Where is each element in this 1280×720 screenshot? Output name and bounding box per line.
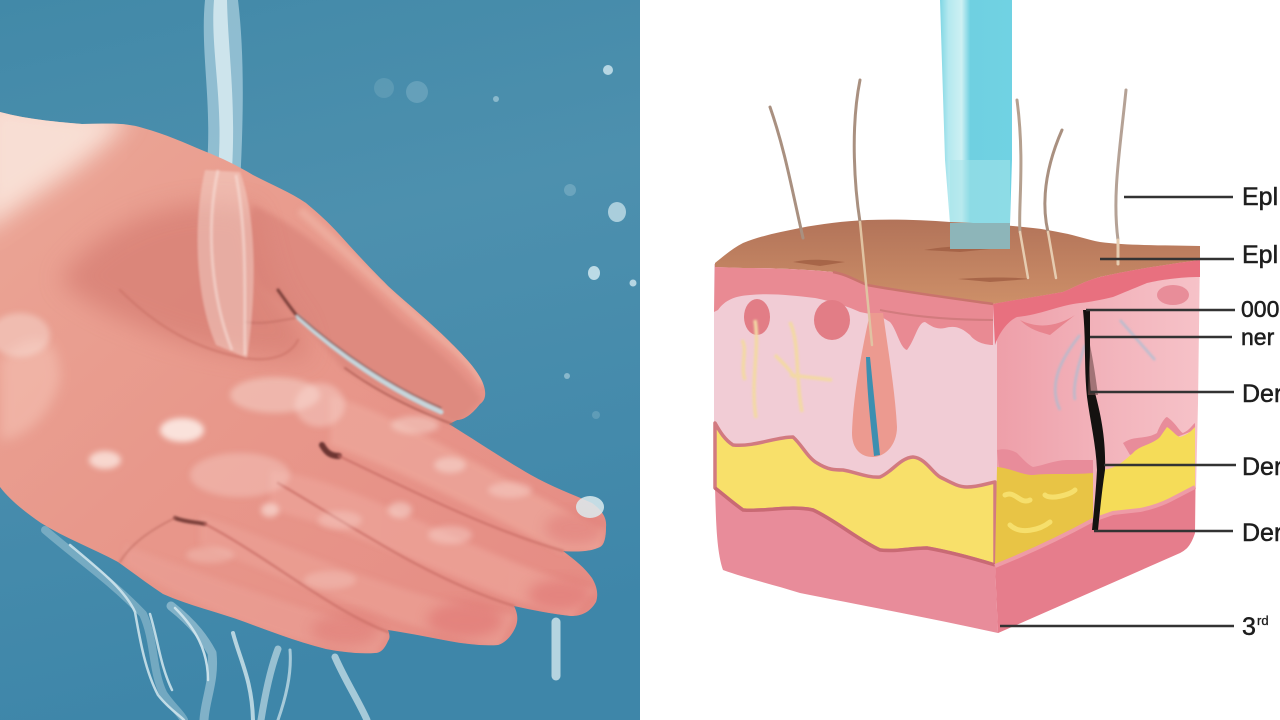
water running off hand	[45, 530, 556, 720]
creases	[120, 290, 563, 632]
subcutaneous fat layer, side	[995, 417, 1195, 566]
leader lines	[1000, 197, 1236, 626]
hypodermis layer, side	[995, 487, 1195, 633]
nerve fibres in dermis	[742, 320, 832, 418]
thumb side shading	[249, 205, 482, 425]
epidermis layer, side	[993, 260, 1200, 345]
clipped labels	[1241, 183, 1280, 641]
diagram panel: skin cross-section	[714, 0, 1280, 641]
front face dermis	[714, 264, 997, 510]
wrist highlight	[0, 112, 133, 235]
grey tint where water meets skin	[950, 223, 1010, 249]
hypodermis layer, front	[715, 488, 998, 633]
clipped labels: 3	[1242, 613, 1256, 641]
clipped labels: ner	[1241, 324, 1275, 350]
clipped labels: Epl	[1242, 183, 1278, 211]
hand	[0, 95, 620, 670]
droplet on fingertip	[576, 496, 604, 518]
red fingertips	[545, 512, 605, 544]
water stream falling onto hand	[204, 0, 243, 185]
wet highlights on palm	[0, 313, 532, 589]
clipped labels: 000	[1241, 296, 1279, 322]
top surface of skin	[715, 220, 1200, 304]
water jet from above	[940, 0, 1012, 224]
hairs	[770, 80, 1126, 345]
clipped labels: rd	[1257, 613, 1269, 628]
epidermis layer, front	[714, 267, 993, 350]
blood vessels, side face	[1055, 320, 1155, 410]
dermal papillae bumps	[744, 299, 850, 340]
palm hollow shading	[60, 204, 310, 358]
wound: dark crack in side face	[1083, 310, 1105, 530]
side face of block	[993, 252, 1200, 633]
photo panel: hand under running water	[0, 0, 640, 720]
subcutaneous fat layer, front	[715, 423, 995, 565]
water droplets in air	[374, 65, 636, 419]
hair follicle	[852, 313, 897, 457]
finger bodies	[330, 395, 606, 552]
clipped labels: Epl	[1242, 241, 1278, 269]
water pooling on palm	[197, 170, 254, 358]
